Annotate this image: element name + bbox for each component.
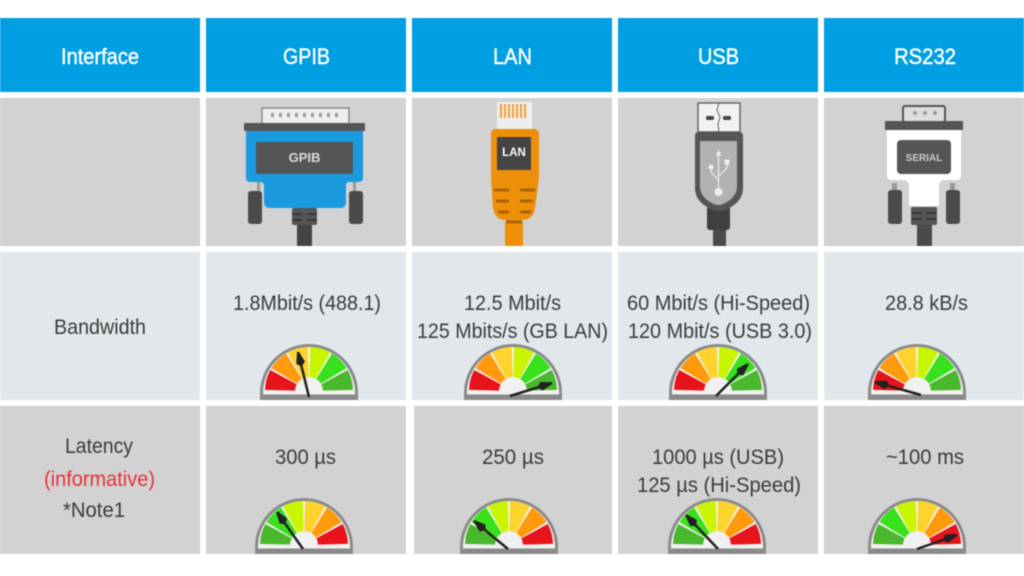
heading: GPIB: GPIB <box>283 44 330 69</box>
gauge: GPIB latency <box>255 500 353 554</box>
icon: LAN connector <box>491 102 539 246</box>
label: Latency: *Note1 <box>63 499 125 522</box>
text: RS232 bandwidth: 28.8 kB/s <box>885 292 968 315</box>
label: Latency: (informative) <box>44 468 155 491</box>
gauge: USB latency <box>668 500 766 554</box>
heading: LAN: LAN <box>493 44 532 69</box>
text: USB latency <box>637 446 801 497</box>
label: Latency <box>44 435 155 522</box>
text: LAN bandwidth <box>417 292 608 343</box>
bandwidth row background <box>0 252 1024 400</box>
bottom margin <box>0 554 1024 576</box>
heading: Interface: Interface <box>61 44 139 69</box>
icon: LAN connector: LAN <box>502 147 526 159</box>
gauge: LAN bandwidth <box>464 346 562 400</box>
icon: serial connector <box>885 106 963 246</box>
gauge: LAN latency <box>460 500 558 554</box>
label: Latency: Latency <box>65 435 133 458</box>
text: GPIB bandwidth: 1.8Mbit/s (488.1) <box>233 292 381 315</box>
text: LAN bandwidth: 125 Mbits/s (GB LAN) <box>417 320 608 343</box>
text: USB bandwidth <box>627 292 812 343</box>
text: LAN bandwidth: 12.5 Mbit/s <box>464 292 561 315</box>
text: RS232 latency: ~100 ms <box>886 446 964 469</box>
heading: USB: USB <box>698 44 739 69</box>
gauge: RS232 latency <box>868 500 966 554</box>
text: LAN latency: 250 µs <box>482 446 544 469</box>
text: USB latency: 1000 µs (USB) <box>652 446 784 469</box>
latency row background <box>0 406 1024 554</box>
gauge: GPIB bandwidth <box>260 346 358 400</box>
gauge: RS232 bandwidth <box>868 346 966 400</box>
icon: serial connector: SERIAL <box>906 153 942 164</box>
icon: GPIB connector: GPIB <box>289 150 320 165</box>
connector row background <box>0 98 1024 246</box>
header row <box>0 18 1024 92</box>
text: USB latency: 125 µs (Hi-Speed) <box>637 474 801 497</box>
label: Bandwidth: Bandwidth <box>54 316 146 339</box>
text: USB bandwidth: 120 Mbit/s (USB 3.0) <box>628 320 812 343</box>
gauge: USB bandwidth <box>669 346 767 400</box>
text: GPIB latency: 300 µs <box>275 446 336 469</box>
icon: GPIB connector <box>244 108 365 246</box>
text: USB bandwidth: 60 Mbit/s (Hi-Speed) <box>627 292 810 315</box>
heading: RS232: RS232 <box>894 44 956 69</box>
icon: USB connector <box>695 103 743 246</box>
